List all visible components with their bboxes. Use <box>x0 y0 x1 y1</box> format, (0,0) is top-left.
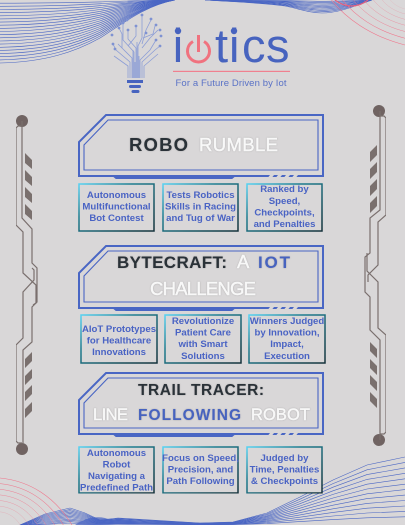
wave: top right blue <box>205 0 372 13</box>
logo wordmark: iotics <box>173 19 290 72</box>
heading: trail tracer line following robot: FOLLOWING <box>138 407 241 424</box>
heading: bytecraft a iot challenge: IOT <box>258 253 291 272</box>
heading: robo rumble <box>129 134 278 155</box>
wave: top left <box>0 0 175 63</box>
heading: bytecraft a iot challenge: A <box>237 251 250 272</box>
box: ranked by speed: Speed, <box>269 196 301 207</box>
wave: bottom left red <box>0 478 72 525</box>
panel: robo rumble <box>79 115 323 231</box>
heading: trail tracer line following robot: LINE <box>93 406 128 424</box>
panel frame <box>79 373 323 436</box>
box: autonomous multifunctional bot contest: Autonomous <box>87 190 146 201</box>
box: autonomous robot: Robot <box>103 460 131 470</box>
box: winners judged: Impact, <box>270 339 304 350</box>
box: focus on speed <box>162 447 239 493</box>
heading: trail tracer line following robot: ROBOT <box>251 406 310 424</box>
box: winners judged: Execution <box>264 351 310 362</box>
box: autonomous multifunctional bot contest: Multifunctional <box>82 202 151 212</box>
box: judged by time: & Checkpoints <box>251 476 318 487</box>
box: aiot prototypes <box>81 315 157 363</box>
box: revolutionize patient care: Solutions <box>181 351 225 362</box>
wave: bottom blue <box>20 457 405 525</box>
heading: robo rumble: ROBO <box>129 134 188 155</box>
wave: top right red <box>330 0 405 45</box>
logo wordmark: iotics: tics <box>215 19 290 72</box>
box: tests robotics skills: Tests Robotics <box>166 190 235 201</box>
logo <box>111 14 290 93</box>
box: autonomous multifunctional bot contest: Bot Contest <box>89 213 144 224</box>
box: autonomous robot: Autonomous <box>87 448 146 459</box>
heading: trail tracer line following robot: TRAIL TRACER: <box>138 382 264 399</box>
box: aiot prototypes: AIoT Prototypes <box>82 324 156 335</box>
icon: circuit light bulb <box>111 14 162 93</box>
box: aiot prototypes: Innovations <box>92 347 146 358</box>
box: winners judged: by Innovation, <box>254 328 320 338</box>
box: focus on speed: Path Following <box>166 476 235 487</box>
wave: red ring at top right <box>335 0 368 6</box>
panel: bytecraft <box>79 246 325 363</box>
box: focus on speed: Precision, and <box>168 464 233 476</box>
box: judged by time: Judged by <box>261 453 309 464</box>
box: judged by time <box>247 447 322 493</box>
logo underline <box>173 71 290 72</box>
heading: bytecraft a iot challenge: CHALLENGE <box>150 278 256 299</box>
box: tests robotics skills <box>163 184 238 231</box>
box: ranked by speed: and Penalties <box>254 219 315 230</box>
box: ranked by speed <box>247 184 322 231</box>
logo wordmark: iotics: i <box>173 19 183 72</box>
box: ranked by speed: Checkpoints, <box>254 208 315 218</box>
circuit: left <box>16 115 37 455</box>
heading: trail tracer line following robot <box>93 382 310 424</box>
panel frame <box>79 246 323 310</box>
box: tests robotics skills: and Tug of War <box>166 213 235 224</box>
box: tests robotics skills: Skills in Racing <box>165 202 236 212</box>
box: focus on speed: Focus on Speed, <box>162 453 239 464</box>
box: autonomous robot <box>79 447 154 494</box>
box: winners judged: Winners Judged <box>250 316 324 327</box>
box: winners judged <box>249 315 325 363</box>
box: judged by time: Time, Penalties <box>250 464 319 476</box>
box: revolutionize patient care: with Smart <box>177 339 228 350</box>
box: ranked by speed: Ranked by <box>260 184 309 195</box>
box: revolutionize patient care <box>165 315 241 363</box>
panel: trail tracer <box>79 373 323 494</box>
wave: bottom pinch <box>75 517 140 525</box>
box: autonomous robot: Navigating a <box>88 471 146 482</box>
tagline: For a Future Driven by Iot <box>176 78 287 89</box>
heading: bytecraft a iot challenge: BYTECRAFT: <box>117 253 227 272</box>
box: revolutionize patient care: Revolutionize <box>172 316 234 327</box>
panel frame <box>79 115 323 178</box>
box: revolutionize patient care: Patient Care <box>175 328 231 338</box>
box: autonomous multifunctional bot contest <box>79 184 154 231</box>
box: autonomous robot: Predefined Path <box>80 482 153 494</box>
circuit: right <box>365 105 386 446</box>
box: aiot prototypes: for Healthcare <box>87 336 151 346</box>
heading: robo rumble: RUMBLE <box>199 134 278 155</box>
heading: bytecraft a iot challenge <box>117 251 291 299</box>
